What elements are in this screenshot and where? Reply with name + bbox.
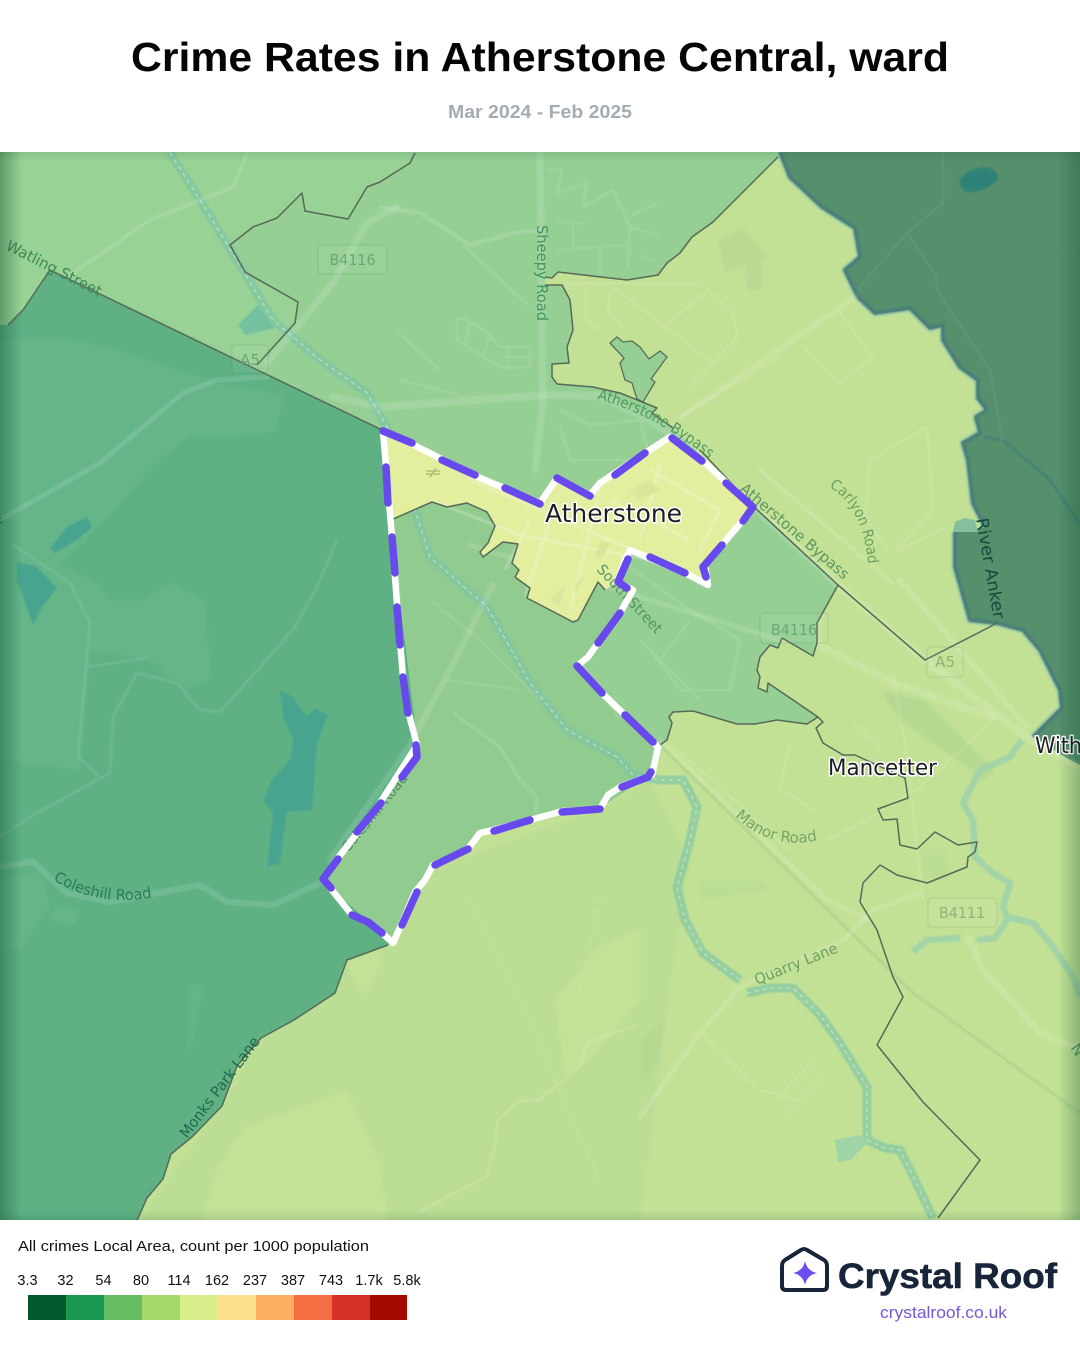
legend values: 743	[319, 1273, 343, 1289]
road name labels: Carlyon Road	[832, 480, 880, 563]
mid green zone: north and central	[81, 152, 837, 848]
website url: crystalroof.co.uk	[880, 1304, 1008, 1322]
legend values: 3.3	[17, 1273, 38, 1289]
choropleth map	[0, 152, 1080, 1220]
light zone lighter field patches	[200, 930, 640, 1225]
edge vignette	[0, 152, 1080, 1220]
legend values: 5.8k	[393, 1273, 421, 1289]
road shield labels: B4116	[771, 621, 817, 639]
legend values: 114	[167, 1273, 191, 1289]
legend values: 80	[133, 1273, 149, 1289]
main roads	[0, 152, 1080, 1211]
minor streets	[0, 170, 993, 1180]
pond by river	[953, 518, 978, 532]
legend values: 162	[205, 1273, 229, 1289]
legend values	[17, 1273, 421, 1289]
road shield labels: B4111	[939, 904, 985, 922]
legend title: All crimes Local Area, count per 1000 population	[18, 1239, 369, 1255]
light-zone island north of ward	[610, 337, 667, 402]
ward inner streets	[430, 465, 720, 610]
road shield labels: A5	[935, 653, 955, 671]
road name labels: Manor Road	[736, 809, 816, 843]
road name labels: South Street	[593, 562, 665, 637]
river anker	[780, 152, 1062, 737]
wordmark: Crystal Roof	[838, 1257, 1057, 1296]
road name labels	[0, 226, 1080, 1138]
place label: Mancetter: Mancetter	[828, 756, 938, 781]
road shield labels: A5	[240, 351, 260, 369]
road name labels: Sheepy Road	[533, 225, 551, 321]
ward boundary: white base	[323, 431, 753, 943]
lakes	[17, 167, 998, 867]
road name labels: Quarry Lane	[752, 939, 840, 989]
title: Crime Rates in Atherstone Central, ward	[131, 34, 949, 80]
legend values: 387	[281, 1273, 305, 1289]
forest zone: low crime west	[0, 270, 418, 1225]
legend values: 54	[95, 1273, 112, 1289]
legend values: 1.7k	[355, 1273, 383, 1289]
forest lighter fields	[0, 338, 285, 1050]
canal	[170, 153, 933, 1218]
river halo	[780, 152, 1062, 737]
ward yellow high-rate area	[383, 431, 753, 622]
mid green north-west variant	[0, 152, 415, 365]
road name labels: Monks Park Lane	[176, 1033, 264, 1141]
railway line south-east	[660, 745, 1080, 1113]
road name labels: River Anker	[971, 516, 1008, 620]
road shields	[232, 245, 997, 927]
road name labels: Coleshill Road	[56, 872, 151, 900]
road name labels: Watling Street	[3, 237, 105, 300]
place label: Atherstone: Atherstone	[545, 499, 682, 528]
road name labels: Atherstone Bypass	[597, 390, 714, 458]
river anker tributary	[985, 437, 1080, 525]
ward boundary: purple dashes	[323, 431, 753, 933]
stream east	[913, 740, 1080, 997]
legend	[17, 1239, 421, 1320]
ward south part fill	[462, 788, 631, 848]
north-east dark zone	[780, 152, 1080, 765]
stream south pond	[835, 1135, 868, 1162]
road name labels: Atherstone Bypass	[740, 484, 848, 579]
date range subtitle: Mar 2024 - Feb 2025	[448, 101, 632, 122]
road shield labels	[240, 251, 985, 922]
legend colour scale	[28, 1295, 407, 1320]
icon: railway station	[426, 468, 440, 477]
icon: house with star	[782, 1249, 827, 1290]
legend values: 237	[243, 1273, 267, 1289]
road shield labels: B4116	[330, 251, 376, 269]
light zone darker field patches	[640, 692, 993, 1088]
logo: Crystal Roof	[782, 1249, 1057, 1322]
map base: low crime light zone	[138, 156, 1080, 1220]
legend values: 32	[57, 1273, 74, 1289]
north-east zone faint tracks	[857, 153, 1003, 443]
road name labels: Coleshill Road	[339, 771, 412, 856]
area boundary lines	[8, 153, 997, 1225]
ward buildings	[550, 480, 660, 605]
